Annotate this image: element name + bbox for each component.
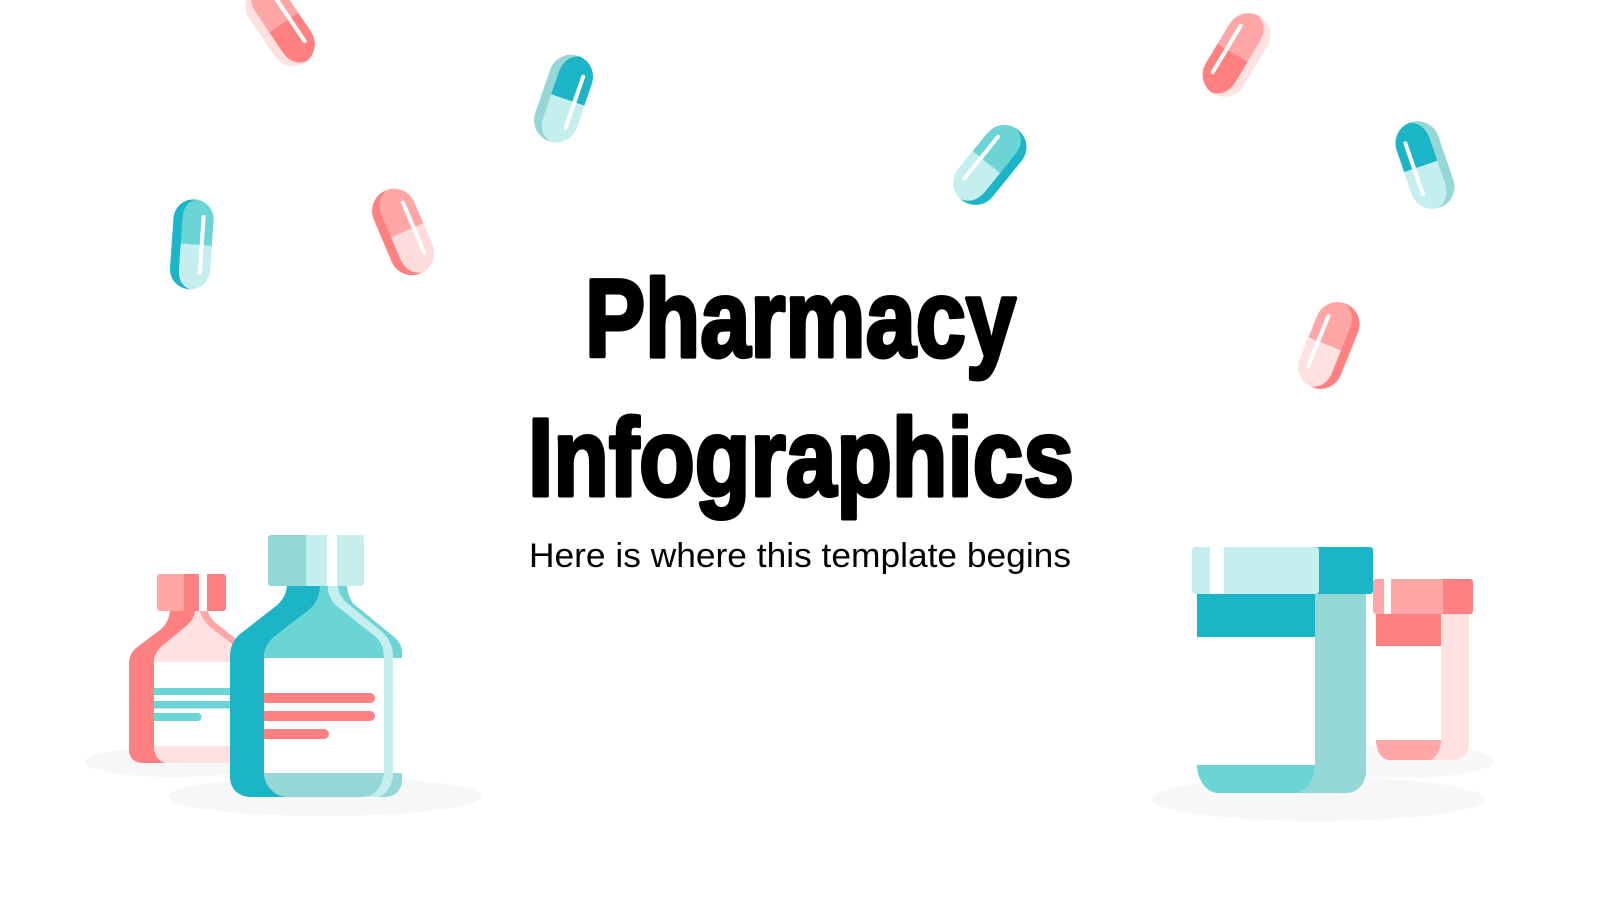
pill: coral lower right [1292,296,1366,395]
pill: teal left [169,198,215,291]
pill: coral left [365,182,441,282]
large teal jar [1192,547,1373,793]
shadow: small bottle [85,747,265,777]
pill: coral top left [237,0,323,75]
pill: teal centre right [945,116,1035,214]
small coral bottle [129,574,240,763]
small coral jar [1373,579,1473,760]
subtitle: Here is where this template begins [529,537,1071,575]
large teal bottle [230,535,402,797]
shadow: large jar [1152,777,1484,821]
shadow: small jar [1306,744,1494,778]
title: Pharmacy [585,258,1016,380]
pill: teal top centre [528,49,599,148]
illustration: pill jars [1152,547,1494,821]
title [528,258,1074,520]
title: Infographics [528,396,1074,520]
pill: teal far right [1390,115,1460,215]
pill: coral top right [1194,5,1279,105]
shadow: large bottle [168,777,482,816]
illustration: medicine bottles [85,535,482,816]
